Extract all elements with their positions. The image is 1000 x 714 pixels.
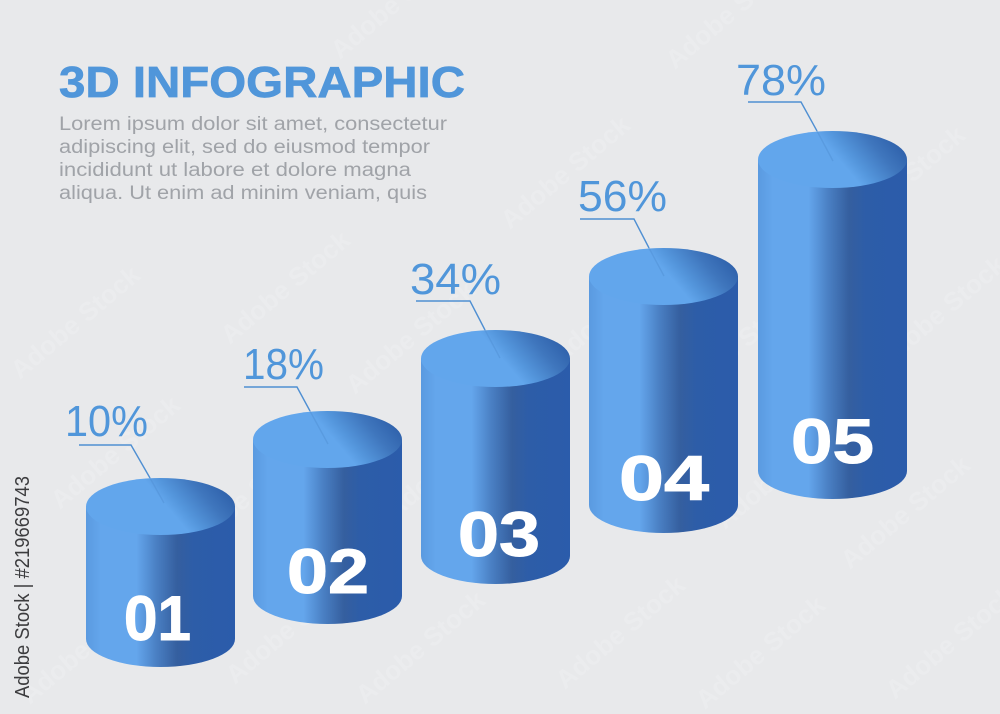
text: Adobe Stock [220,564,361,690]
text: Adobe Stock [665,284,806,410]
text: Adobe Stock [45,389,186,515]
text: Adobe Stock [380,399,521,525]
title: 3D INFOGRAPHIC [59,58,465,107]
text: Adobe Stock [690,589,831,714]
text block: description: Lorem ipsum dolor sit amet, consectetur [59,114,448,135]
leader line 34% [416,301,500,358]
value label 18%: 18% [243,340,324,389]
text: Adobe Stock [215,224,356,350]
number 01: 01 [124,584,191,654]
text block: description: incididunt ut labore et dolore magna [59,160,411,181]
text: Adobe Stock [5,259,146,385]
text: Adobe Stock [545,244,686,370]
text: Adobe Stock [350,584,491,710]
text: Adobe Stock [830,119,971,245]
cylinder 01 [65,397,235,667]
number 03: 03 [458,500,540,570]
number 05: 05 [791,407,874,477]
text: Adobe Stock [175,434,316,560]
value label 78%: 78% [736,56,826,105]
value label 34%: 34% [410,255,501,304]
leader line 18% [244,387,328,444]
text: Adobe Stock [340,274,481,400]
value label 56%: 56% [578,172,667,221]
text: Adobe Stock [710,409,851,535]
leader line 56% [580,219,664,276]
cylinder 05 [736,56,907,499]
text: Adobe Stock [495,109,636,235]
text block: description: adipiscing elit, sed do eiusmod tempor [59,137,431,158]
number 04: 04 [619,444,709,514]
text block: description: aliqua. Ut enim ad minim veniam, quis [59,183,427,204]
leader line 78% [748,102,833,161]
text block: description [59,114,448,204]
cylinder 03 [410,255,570,584]
cylinder 02 [243,340,402,624]
text: Adobe Stock [835,449,976,575]
text: Adobe Stock [15,584,156,710]
number 02: 02 [287,537,369,607]
cylinder 04 [578,172,738,533]
chart: rising cylinders [65,56,907,667]
leader line 10% [79,445,164,503]
text: Adobe Stock [550,569,691,695]
stock credit: Adobe Stock | #219669743 [12,476,34,698]
value label 10%: 10% [65,397,148,446]
